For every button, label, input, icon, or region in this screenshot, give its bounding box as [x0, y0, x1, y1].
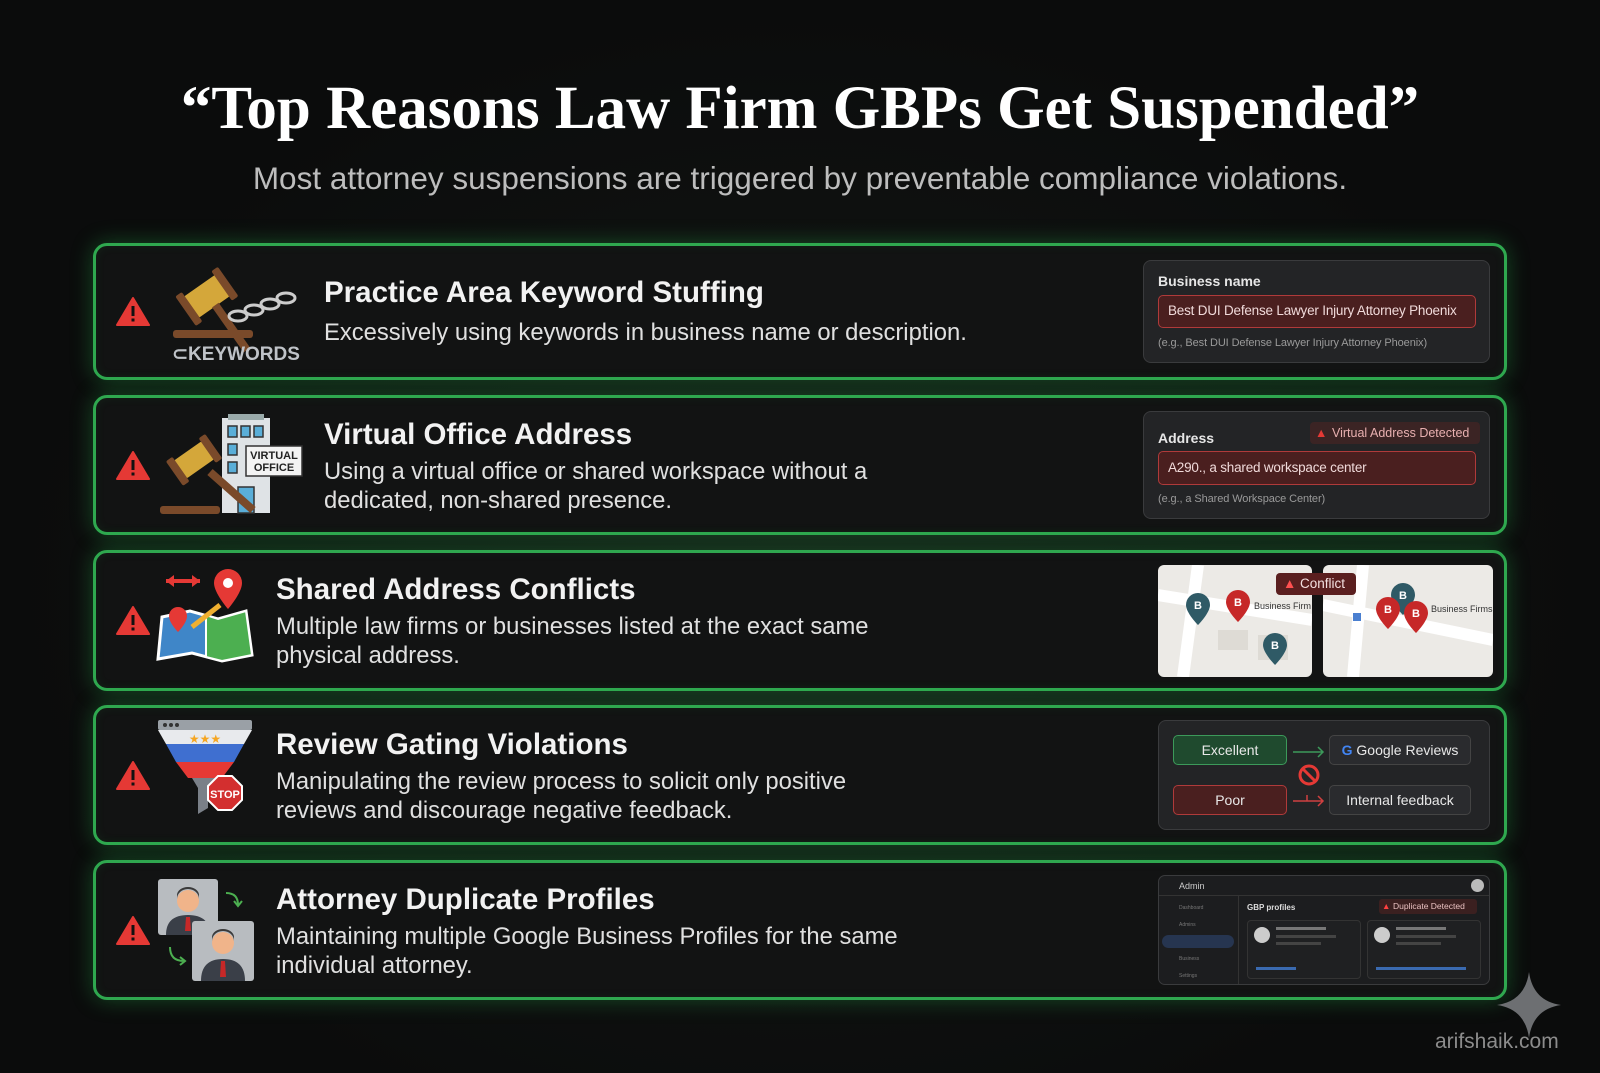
map left: B [1271, 640, 1279, 652]
review flow mockup: Excellent [1202, 742, 1258, 758]
description: Using a virtual office or shared workspace without a [324, 458, 867, 485]
form mockup: address: Virtual Address Detected [1332, 426, 1469, 440]
footer credit: arifshaik.com [1435, 1030, 1559, 1053]
card 3: shared address [93, 550, 1507, 691]
admin dashboard mockup: Dashboard [1179, 905, 1203, 911]
admin dashboard mockup: ▲ [1382, 901, 1390, 911]
heading: Practice Area Keyword Stuffing [324, 276, 764, 309]
admin dashboard mockup: Business [1179, 956, 1199, 962]
subtitle: Most attorney suspensions are triggered by preventable compliance violations. [253, 160, 1347, 196]
map right: B [1412, 608, 1420, 620]
card 2: virtual office [93, 395, 1507, 535]
card 4: review gating [93, 705, 1507, 845]
description: individual attorney. [276, 952, 473, 979]
heading: Attorney Duplicate Profiles [276, 883, 655, 916]
description: dedicated, non-shared presence. [324, 487, 672, 514]
form mockup: address: Address [1158, 430, 1214, 446]
icon: gavel keywords: ⊂KEYWORDS [172, 344, 300, 365]
map right: B [1399, 590, 1407, 602]
icon: gavel keywords [172, 267, 300, 365]
icon: duplicate attorneys [158, 879, 254, 981]
heading: Review Gating Violations [276, 728, 628, 761]
icon: gavel and building [160, 414, 303, 514]
form mockup: business name: Best DUI Defense Lawyer Injury Attorney Phoenix [1168, 303, 1456, 318]
conflict badge: ▲ [1283, 576, 1296, 591]
admin dashboard mockup: Admin [1179, 881, 1205, 891]
icon: funnel with stop: ★★★ [189, 732, 221, 746]
description: Maintaining multiple Google Business Profiles for the same [276, 923, 898, 950]
conflict badge [1276, 573, 1356, 595]
review flow mockup [1158, 720, 1490, 830]
icon: funnel with stop [158, 720, 252, 814]
icon: warning [116, 606, 150, 635]
description: reviews and discourage negative feedback. [276, 797, 732, 824]
description: Manipulating the review process to solicit only positive [276, 768, 846, 795]
admin dashboard mockup [1158, 875, 1490, 985]
review flow mockup: Poor [1215, 792, 1245, 808]
form mockup: address [1143, 411, 1490, 519]
map right [1323, 565, 1493, 677]
icon: warning [116, 451, 150, 480]
map left: Business Firm [1254, 601, 1311, 611]
description [276, 613, 869, 669]
icon: warning [116, 297, 150, 326]
map left: B [1194, 600, 1202, 612]
description: Excessively using keywords in business name or description. [324, 319, 967, 346]
icon: warning [116, 916, 150, 945]
review flow mockup: G Google Reviews [1342, 742, 1458, 758]
map right: Business Firms [1431, 604, 1493, 614]
icon: gavel and building: VIRTUAL [250, 450, 298, 462]
admin dashboard mockup: Settings [1179, 973, 1197, 979]
description [276, 923, 898, 979]
description [324, 458, 868, 514]
title: “Top Reasons Law Firm GBPs Get Suspended” [181, 75, 1419, 142]
icon: map with pins [156, 569, 254, 662]
map mockups [1158, 565, 1493, 677]
description [276, 768, 846, 824]
form mockup: address: ▲ [1315, 426, 1327, 440]
icon: warning [116, 761, 150, 790]
admin dashboard mockup: Admins [1179, 922, 1196, 928]
form mockup: business name [1143, 260, 1490, 363]
description: physical address. [276, 642, 460, 669]
icon: funnel with stop: STOP [210, 789, 240, 801]
map left: B [1234, 597, 1242, 609]
form mockup: business name: Business name [1158, 273, 1261, 289]
admin dashboard mockup: GBP profiles [1247, 903, 1295, 912]
icon: gavel and building: OFFICE [254, 462, 294, 474]
description: Multiple law firms or businesses listed at the exact same [276, 613, 869, 640]
heading: Virtual Office Address [324, 418, 632, 451]
form mockup: address: A290., a shared workspace center [1168, 460, 1366, 475]
admin dashboard mockup: Duplicate Detected [1393, 901, 1465, 911]
heading: Shared Address Conflicts [276, 573, 636, 606]
conflict badge: Conflict [1300, 576, 1345, 591]
form mockup: business name: (e.g., Best DUI Defense Lawyer Injury Attorney Phoenix) [1158, 337, 1427, 349]
map right: B [1384, 604, 1392, 616]
card 1: keyword stuffing [93, 243, 1507, 380]
icon: sparkle [1497, 972, 1560, 1038]
card 5: duplicate profiles [93, 860, 1507, 1000]
review flow mockup: Internal feedback [1346, 792, 1454, 808]
map left [1158, 565, 1312, 677]
form mockup: address: (e.g., a Shared Workspace Center) [1158, 493, 1325, 505]
admin dashboard mockup: GBP profiles [1179, 939, 1207, 945]
